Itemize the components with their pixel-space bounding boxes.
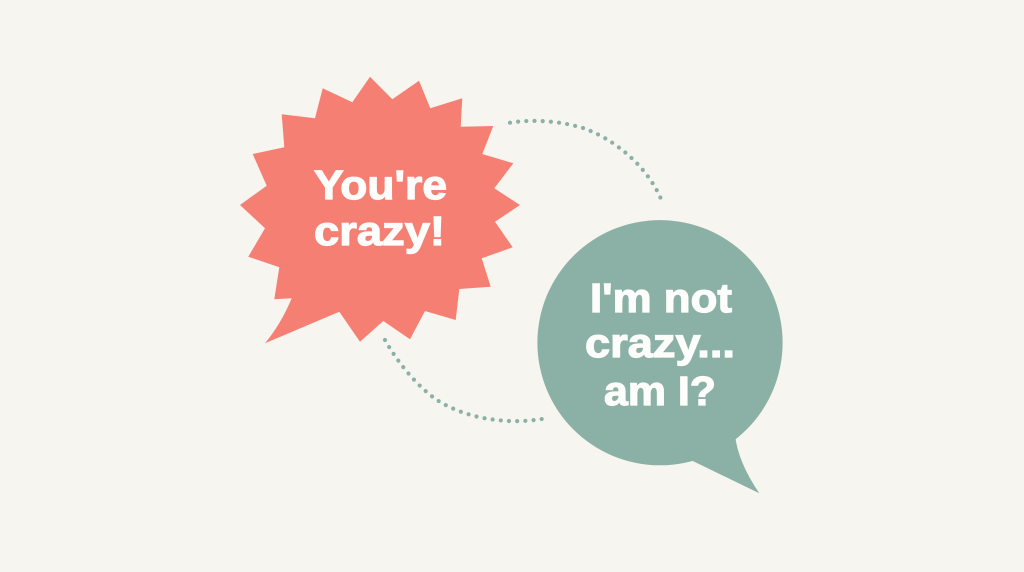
starburst text: You're <box>314 162 447 208</box>
round bubble text: I'm not <box>590 275 732 321</box>
round bubble circle <box>537 220 783 465</box>
starburst speech bubble: You're crazy! <box>240 77 520 343</box>
round speech bubble: I'm not crazy... am I? <box>537 220 783 493</box>
dotted connector: top arc from starburst to round bubble <box>510 121 663 203</box>
round bubble text: crazy... <box>585 320 735 366</box>
starburst shape <box>240 77 520 343</box>
starburst text <box>314 162 447 254</box>
starburst text: crazy! <box>314 208 445 254</box>
dotted connector: bottom arc from round bubble to starburst <box>385 340 542 421</box>
round bubble text: am I? <box>604 368 716 414</box>
round bubble text <box>585 275 735 414</box>
round bubble tail <box>660 400 759 493</box>
